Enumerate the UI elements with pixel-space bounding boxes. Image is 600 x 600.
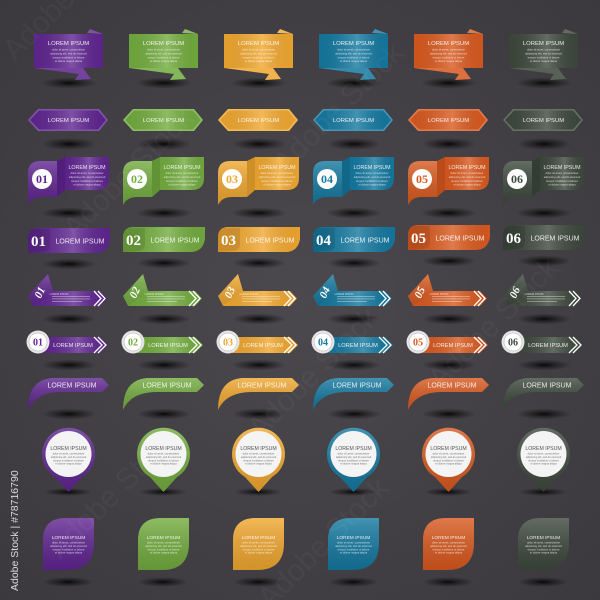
pin yellow: adipiscing elit, sed do eiusmod [241,455,277,459]
bar 02 green [123,227,205,268]
banner orange: adipiscing elit, sed do eiusmod [430,52,467,56]
pin olive: dolor sit amet, consectetuer [528,452,560,456]
arrow tab 04 blue: LOREM IPSUM [335,292,354,296]
bar 02 green: 02 [126,233,141,249]
pin purple: tempor incididunt ut labore [53,458,84,462]
ribbon green [123,378,204,420]
arrow tab 05 orange: LOREM IPSUM [430,292,449,296]
leaf orange [423,518,474,587]
tag 01 purple: dolor sit amet, consectetuer [70,171,104,175]
tag 04 blue: LOREM IPSUM [353,165,391,171]
banner blue: tempor incididunt ut labore [338,56,370,60]
banner orange: tempor incididunt ut labore [433,56,465,60]
banner green: tempor incididunt ut labore [148,56,180,60]
leaf green: tempor incididunt ut labore [148,548,180,552]
row: curved ribbons [28,378,584,420]
pin green: dolor sit amet, consectetuer [148,452,180,456]
banner yellow: tempor incididunt ut labore [243,56,275,60]
pin blue: tempor incididunt ut labore [338,458,369,462]
leaf olive [518,518,569,587]
pin blue: et dolore magna aliqua [340,462,367,466]
ribbon orange [408,378,489,420]
stock watermark: Adobe Stock [422,251,566,395]
stock watermark: Adobe Stock [57,101,201,245]
banner olive: adipiscing elit, sed do eiusmod [525,52,562,56]
arrow tab 05 orange: 05 [413,285,428,300]
arrow tab 03 yellow: 03 [223,285,238,300]
leaf purple: dolor sit amet, consectetuer [52,540,85,544]
ribbon purple [28,378,109,420]
bar 03 yellow: LOREM IPSUM [245,238,295,244]
tag 01 purple: adipiscing elit, sed do eiusmod [69,175,106,179]
arrow tab 06 olive [503,274,582,324]
banner blue: LOREM IPSUM [333,41,374,47]
pin olive: tempor incididunt ut labore [528,458,559,462]
bar 04 blue [313,227,395,268]
leaf blue [328,518,379,587]
banner blue: adipiscing elit, sed do eiusmod [335,52,372,56]
tag 06 olive [503,157,584,218]
hexagon green: LOREM IPSUM [143,118,184,124]
leaf yellow: tempor incididunt ut labore [243,548,275,552]
leaf purple: tempor incididunt ut labore [53,548,85,552]
pin green: et dolore magna aliqua [150,462,177,466]
tag 01 purple [28,157,109,218]
bar 01 purple [28,228,110,270]
banner purple: et dolore magna aliqua [55,59,83,63]
leaf green [138,518,189,587]
arrow tab 06 olive: 06 [508,285,523,300]
pin purple [42,428,95,496]
ribbon green: LOREM IPSUM [142,382,192,390]
arrow tab 04 blue [313,274,392,324]
row: numbered bars [28,225,585,270]
tag 01 purple: et dolore magna aliqua [73,182,101,186]
hexagon olive [503,109,583,150]
leaf yellow: adipiscing elit, sed do eiusmod [240,544,277,548]
leaf yellow [233,518,284,587]
arrow tab 01 purple [28,274,107,324]
pin purple: et dolore magna aliqua [55,462,82,466]
pin green [137,428,190,496]
pin purple: LOREM IPSUM [50,446,87,452]
leaf olive: LOREM IPSUM [527,535,560,541]
banner orange: LOREM IPSUM [428,41,469,47]
banner orange [414,29,483,88]
tag 06 olive: 06 [511,172,523,186]
circle arrow 01 purple: LOREM IPSUM [53,343,93,349]
arrow tab 02 green: 02 [128,285,143,300]
pin yellow: tempor incididunt ut labore [243,458,274,462]
bar 05 orange [408,225,490,266]
pin purple: dolor sit amet, consectetuer [53,452,85,456]
banner olive [509,29,578,88]
tag 03 yellow [218,157,299,218]
bar 06 olive [503,225,585,266]
banner purple [34,29,103,88]
banner green: dolor sit amet, consectetuer [147,48,180,52]
tag 01 purple: LOREM IPSUM [68,165,106,171]
tag 03 yellow: LOREM IPSUM [258,165,296,171]
bar 01 purple: 01 [31,234,46,250]
pin orange: tempor incididunt ut labore [433,458,464,462]
banner olive: et dolore magna aliqua [530,59,558,63]
leaf blue: et dolore magna aliqua [340,550,368,554]
circle arrow 06 olive [502,330,583,370]
bar 04 blue: 04 [316,233,332,249]
hexagon yellow [218,109,298,150]
banner purple: tempor incididunt ut labore [53,56,85,60]
row: leaf cards [43,518,569,587]
pin green: adipiscing elit, sed do eiusmod [146,455,182,459]
tag 06 olive: LOREM IPSUM [543,165,581,171]
circle arrow 01 purple: 01 [33,338,43,348]
ribbon orange: LOREM IPSUM [427,382,477,390]
arrow tab 03 yellow: LOREM IPSUM [240,292,259,296]
pin olive: et dolore magna aliqua [530,462,557,466]
tag 06 olive: dolor sit amet, consectetuer [545,171,579,175]
circle arrow 03 yellow: LOREM IPSUM [243,343,283,349]
pin orange: dolor sit amet, consectetuer [433,452,465,456]
leaf orange: dolor sit amet, consectetuer [432,540,465,544]
banner yellow: LOREM IPSUM [238,41,279,47]
leaf green: adipiscing elit, sed do eiusmod [145,544,182,548]
ribbon olive: LOREM IPSUM [522,382,572,390]
tag 06 olive: tempor incididunt ut labore [546,179,578,183]
leaf olive: et dolore magna aliqua [530,550,558,554]
tag 02 green: et dolore magna aliqua [168,182,196,186]
ribbon yellow [218,378,299,420]
leaf green: dolor sit amet, consectetuer [147,540,180,544]
tag 04 blue: 04 [321,172,333,186]
leaf orange: tempor incididunt ut labore [433,548,465,552]
tag 04 blue: et dolore magna aliqua [358,182,386,186]
arrow tab 01 purple: 01 [33,285,48,300]
arrow tab 02 green [123,274,202,324]
tag 05 orange: et dolore magna aliqua [453,182,481,186]
arrow tab 04 blue: 04 [318,285,333,300]
leaf olive: adipiscing elit, sed do eiusmod [525,544,562,548]
banner yellow [224,29,293,88]
arrow tab 06 olive: LOREM IPSUM [525,292,544,296]
pin yellow: dolor sit amet, consectetuer [243,452,275,456]
tag 03 yellow: et dolore magna aliqua [263,182,291,186]
tag 03 yellow: dolor sit amet, consectetuer [260,171,294,175]
banner green [129,29,198,88]
circle arrow 05 orange [406,330,488,370]
row: origami banners [34,29,578,88]
leaf orange: adipiscing elit, sed do eiusmod [430,544,467,548]
stock watermark: Adobe Stock [267,36,411,180]
pin green: tempor incididunt ut labore [148,458,179,462]
pin orange: LOREM IPSUM [430,446,467,452]
bar 02 green: LOREM IPSUM [150,238,200,244]
leaf blue: LOREM IPSUM [337,535,370,541]
leaf purple: et dolore magna aliqua [55,550,83,554]
leaf orange: LOREM IPSUM [432,535,465,541]
tag 04 blue: adipiscing elit, sed do eiusmod [354,175,391,179]
banner yellow: adipiscing elit, sed do eiusmod [240,52,277,56]
banner blue: dolor sit amet, consectetuer [337,48,370,52]
bar 01 purple: LOREM IPSUM [55,238,105,246]
leaf purple [43,518,94,587]
circle arrow 04 blue: 04 [318,338,328,348]
tag 04 blue: dolor sit amet, consectetuer [355,171,389,175]
pin blue [327,428,380,496]
circle arrow 06 olive: 06 [508,338,518,348]
hexagon orange [408,109,488,150]
circle arrow 03 yellow [216,330,298,370]
banner olive: dolor sit amet, consectetuer [527,48,560,52]
bar 03 yellow [218,227,300,268]
bar 06 olive: LOREM IPSUM [530,236,580,242]
leaf blue: tempor incididunt ut labore [338,548,370,552]
row: arrow tabs [28,274,582,324]
hexagon orange: LOREM IPSUM [428,118,469,124]
tag 05 orange: tempor incididunt ut labore [451,179,483,183]
banner green: et dolore magna aliqua [150,59,178,63]
ribbon yellow: LOREM IPSUM [237,382,287,390]
bar 05 orange: 05 [411,231,426,247]
ribbon olive [503,378,584,420]
circle arrow 02 green: LOREM IPSUM [148,343,188,349]
banner purple: LOREM IPSUM [48,41,89,47]
hexagon yellow: LOREM IPSUM [238,118,279,124]
circle arrow 02 green: 02 [128,338,138,348]
banner green: adipiscing elit, sed do eiusmod [145,52,182,56]
pin orange: adipiscing elit, sed do eiusmod [431,455,467,459]
circle arrow 02 green [122,330,203,370]
stock watermark: Adobe Stock [42,421,186,565]
arrow tab 03 yellow [218,274,297,324]
circle arrow 03 yellow: 03 [223,338,233,348]
tag 02 green: 02 [131,172,143,186]
pin yellow: et dolore magna aliqua [245,462,272,466]
circle arrow 04 blue [312,330,393,370]
pin orange: et dolore magna aliqua [435,462,462,466]
arrow tab 01 purple: LOREM IPSUM [50,292,69,296]
banner orange: et dolore magna aliqua [435,59,463,63]
circle arrow 01 purple [26,330,108,370]
banner orange: dolor sit amet, consectetuer [432,48,465,52]
circle arrow 04 blue: LOREM IPSUM [338,343,378,349]
hexagon purple [28,109,108,150]
hexagon blue [313,109,393,150]
row: hexagon labels [28,109,583,150]
leaf yellow: dolor sit amet, consectetuer [242,540,275,544]
tag 05 orange: 05 [416,172,428,186]
bar 05 orange: LOREM IPSUM [435,236,485,242]
banner blue: et dolore magna aliqua [340,59,368,63]
circle arrow 06 olive: LOREM IPSUM [528,343,568,349]
tag 05 orange: adipiscing elit, sed do eiusmod [449,175,486,179]
leaf yellow: LOREM IPSUM [242,535,275,541]
leaf olive: tempor incididunt ut labore [528,548,560,552]
arrow tab 05 orange [408,274,487,324]
tag 01 purple: 01 [36,172,48,186]
hexagon green [123,109,203,150]
tag 06 olive: adipiscing elit, sed do eiusmod [544,175,581,179]
hexagon purple: LOREM IPSUM [48,118,89,124]
arrow tab 02 green: LOREM IPSUM [145,292,164,296]
tag 02 green: dolor sit amet, consectetuer [165,171,199,175]
row: map pins [42,428,570,496]
pin blue: LOREM IPSUM [335,446,372,452]
leaf olive: dolor sit amet, consectetuer [527,540,560,544]
leaf green: et dolore magna aliqua [150,550,178,554]
banner olive: LOREM IPSUM [523,41,564,47]
tag 02 green: adipiscing elit, sed do eiusmod [164,175,201,179]
tag 04 blue: tempor incididunt ut labore [356,179,388,183]
row: numbered folded tags [28,157,584,218]
stock watermark: Adobe Stock [242,301,386,445]
ribbon blue [313,378,394,420]
bar 06 olive: 06 [506,231,522,247]
tag 02 green: tempor incididunt ut labore [166,179,198,183]
pin orange [422,428,475,496]
banner olive: tempor incididunt ut labore [528,56,560,60]
hexagon olive: LOREM IPSUM [523,118,564,124]
bar 04 blue: LOREM IPSUM [340,238,390,244]
banner green: LOREM IPSUM [143,41,184,47]
tag 03 yellow: adipiscing elit, sed do eiusmod [259,175,296,179]
banner blue [319,29,388,88]
tag 05 orange [408,157,489,218]
stock id caption: Adobe Stock | #78716790 [9,470,21,591]
tag 01 purple: tempor incididunt ut labore [71,179,103,183]
leaf purple: LOREM IPSUM [52,535,85,541]
pin green: LOREM IPSUM [145,446,182,452]
leaf green: LOREM IPSUM [147,535,180,541]
circle arrow 05 orange: LOREM IPSUM [433,343,473,349]
pin blue: dolor sit amet, consectetuer [338,452,370,456]
tag 03 yellow: 03 [226,172,238,186]
pin blue: adipiscing elit, sed do eiusmod [336,455,372,459]
hexagon blue: LOREM IPSUM [333,118,374,124]
bar 03 yellow: 03 [221,233,236,249]
banner yellow: dolor sit amet, consectetuer [242,48,275,52]
pin olive: adipiscing elit, sed do eiusmod [526,455,562,459]
tag 02 green [123,157,204,218]
leaf purple: adipiscing elit, sed do eiusmod [50,544,87,548]
pin olive [517,428,570,496]
tag 02 green: LOREM IPSUM [163,165,201,171]
tag 05 orange: dolor sit amet, consectetuer [450,171,484,175]
leaf yellow: et dolore magna aliqua [245,550,273,554]
ribbon purple: LOREM IPSUM [47,382,97,390]
ribbon blue: LOREM IPSUM [332,382,382,390]
banner yellow: et dolore magna aliqua [245,59,273,63]
tag 05 orange: LOREM IPSUM [448,165,486,171]
tag 06 olive: et dolore magna aliqua [548,182,576,186]
tag 03 yellow: tempor incididunt ut labore [261,179,293,183]
pin purple: adipiscing elit, sed do eiusmod [51,455,87,459]
pin olive: LOREM IPSUM [525,446,562,452]
tag 04 blue [313,157,394,218]
pin yellow: LOREM IPSUM [240,446,277,452]
circle arrow 05 orange: 05 [413,338,423,348]
row: circle number arrows [26,330,583,370]
leaf orange: et dolore magna aliqua [435,550,463,554]
banner purple: dolor sit amet, consectetuer [52,48,85,52]
leaf blue: dolor sit amet, consectetuer [337,540,370,544]
pin yellow [232,428,285,496]
banner purple: adipiscing elit, sed do eiusmod [50,52,87,56]
leaf blue: adipiscing elit, sed do eiusmod [335,544,372,548]
